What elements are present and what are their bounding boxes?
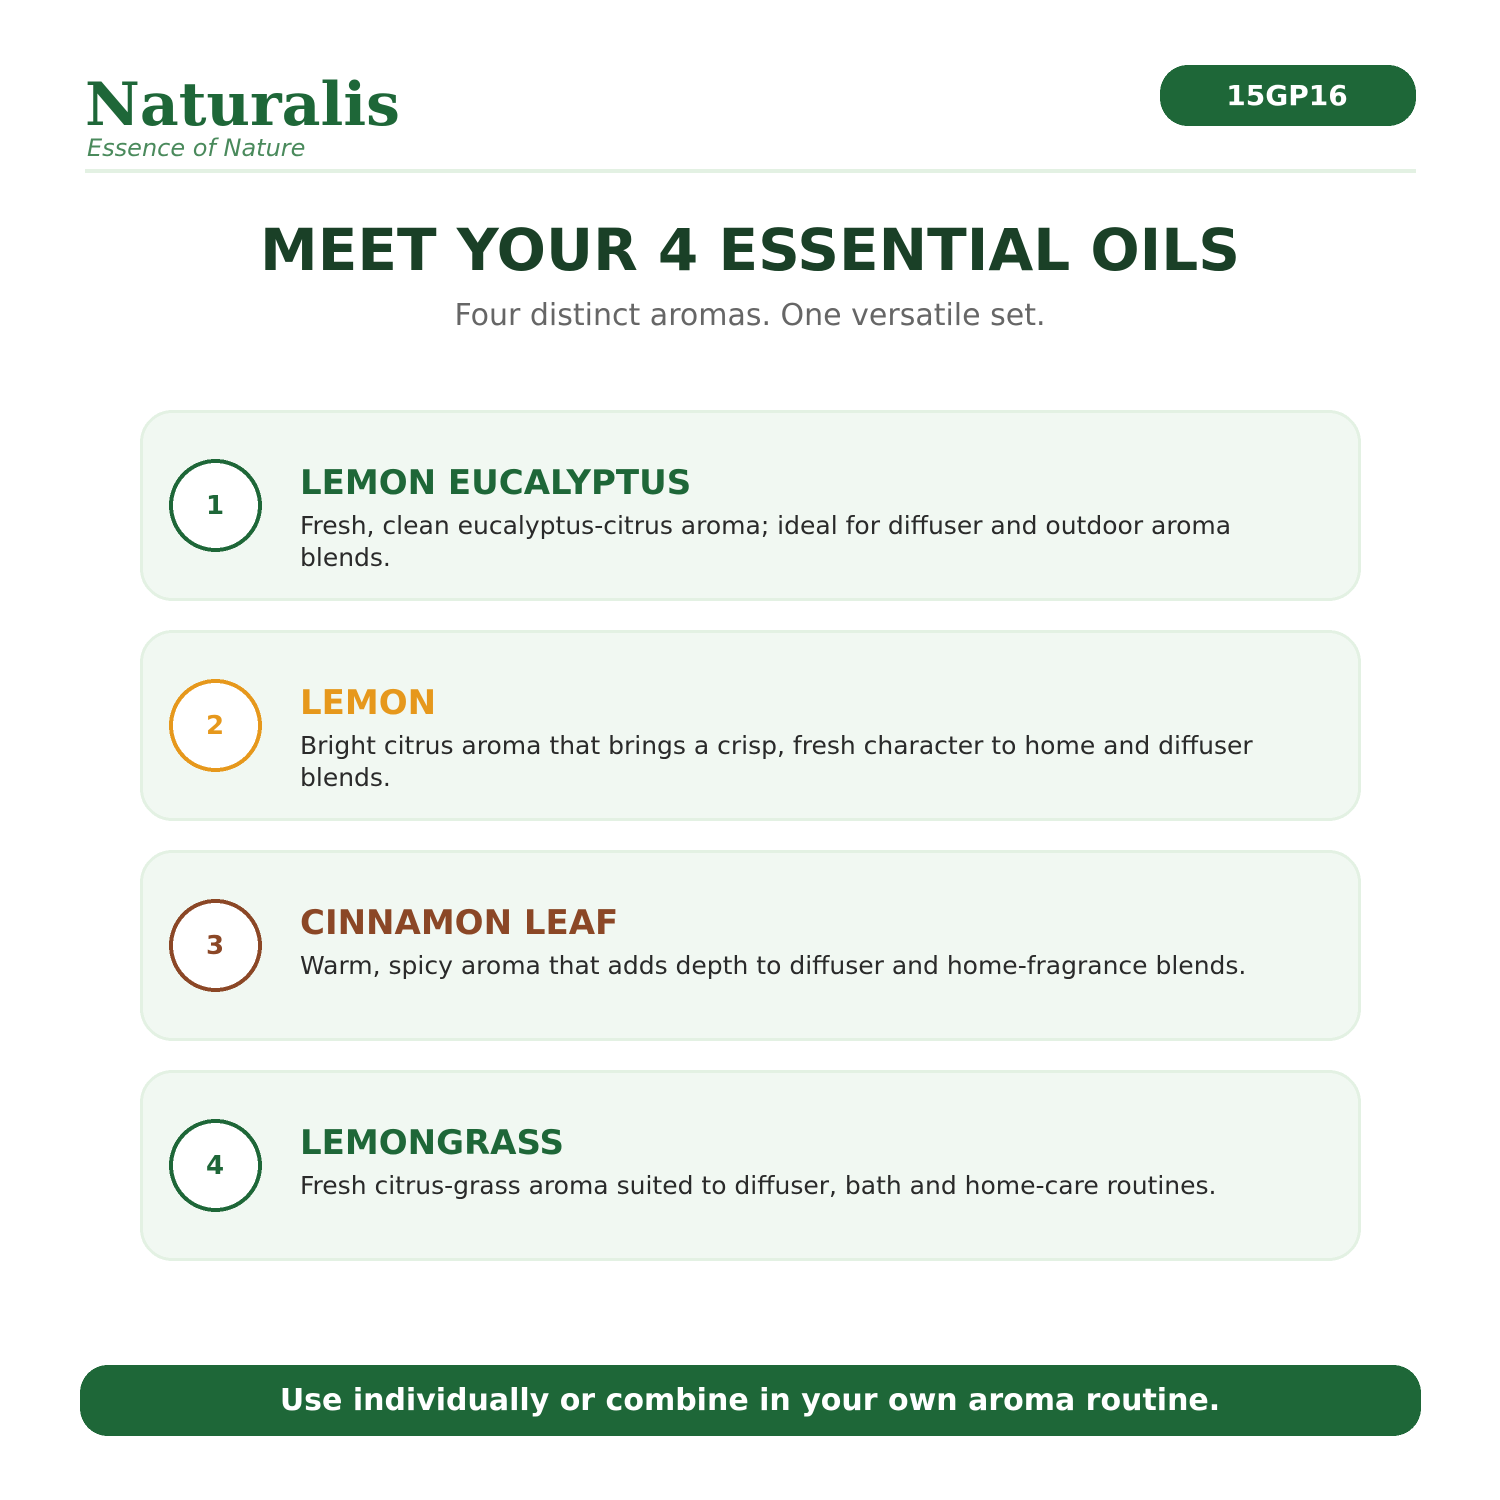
brand tagline: Essence of Nature — [87, 134, 305, 162]
oil 2 description: blends. — [300, 763, 391, 792]
oil 4 description: Fresh citrus-grass aroma suited to diffuser, bath and home-care routines. — [300, 1171, 1216, 1200]
product code badge: 15GP16 — [1226, 79, 1348, 112]
icon: number 3: 3 — [206, 931, 224, 961]
oil 4 name: LEMONGRASS — [300, 1123, 564, 1163]
icon: number 3 — [171, 901, 260, 990]
product code badge — [1160, 65, 1416, 126]
icon: number 4: 4 — [206, 1151, 224, 1181]
footer banner — [80, 1365, 1421, 1436]
icon: number 1 — [171, 461, 260, 550]
icon: number 2 — [171, 681, 260, 770]
oil 1 description: Fresh, clean eucalyptus-citrus aroma; ideal for diffuser and outdoor aroma — [300, 511, 1231, 540]
panel: oil 2 lemon — [142, 632, 1360, 820]
oil 2 description: Bright citrus aroma that brings a crisp, fresh character to home and diffuser — [300, 731, 1253, 760]
panel: oil 4 lemongrass — [142, 1072, 1360, 1260]
panel: oil 1 lemon eucalyptus — [142, 412, 1360, 600]
oil 2 name: LEMON — [300, 683, 436, 723]
main title: MEET YOUR 4 ESSENTIAL OILS — [260, 216, 1240, 284]
oil 1 description: blends. — [300, 543, 391, 572]
icon: number 4 — [171, 1121, 260, 1210]
subtitle: Four distinct aromas. One versatile set. — [454, 298, 1046, 333]
icon: number 2: 2 — [206, 711, 224, 741]
footer banner: Use individually or combine in your own aroma routine. — [280, 1383, 1220, 1418]
icon: number 1: 1 — [206, 491, 224, 521]
brand name: Naturalis — [85, 70, 400, 140]
oil 3 name: CINNAMON LEAF — [300, 903, 618, 943]
oil 3 description: Warm, spicy aroma that adds depth to diffuser and home-fragrance blends. — [300, 951, 1246, 980]
oil 1 name: LEMON EUCALYPTUS — [300, 463, 691, 503]
panel: oil 3 cinnamon leaf — [142, 852, 1360, 1040]
